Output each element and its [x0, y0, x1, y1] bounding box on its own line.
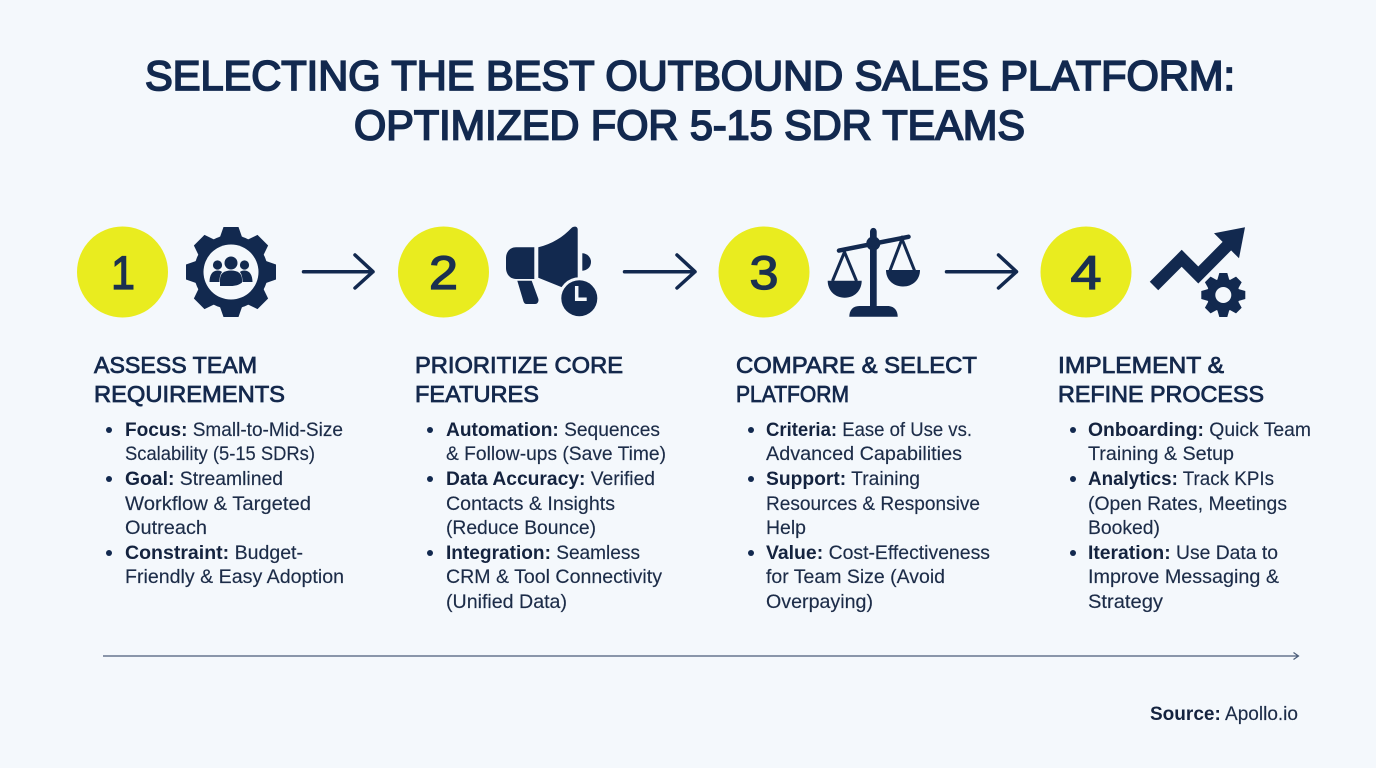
heading: assess team requirements: REQUIREMENTS — [94, 381, 285, 407]
step 3 number badge: 3 — [750, 246, 778, 299]
list: step 3 details: Overpaying) — [766, 591, 873, 613]
list: step 4 details: Onboarding: Quick Team — [1088, 419, 1311, 441]
list: step 3 details — [748, 419, 990, 613]
heading: prioritize core features: FEATURES — [415, 381, 539, 407]
step 2 number badge — [398, 226, 489, 318]
heading: compare and select platform — [736, 352, 977, 407]
source note: Source: Apollo.io — [1150, 703, 1298, 725]
list: step 4 details: Improve Messaging & — [1088, 566, 1279, 588]
step 1 number badge — [77, 226, 168, 318]
list: step 1 details — [106, 419, 344, 588]
heading: compare and select platform: COMPARE & SELECT — [736, 352, 977, 378]
list: step 2 details: & Follow-ups (Save Time) — [446, 443, 666, 465]
list: step 4 details: Analytics: Track KPIs — [1088, 468, 1274, 490]
list: step 2 details: Automation: Sequences — [446, 419, 660, 441]
list: step 4 details — [1070, 419, 1311, 613]
list: step 3 details: Resources & Responsive — [766, 493, 980, 515]
list: step 1 details: Scalability (5-15 SDRs) — [125, 443, 315, 465]
title — [145, 52, 1235, 148]
list: step 3 details: Help — [766, 517, 806, 539]
timeline arrow — [103, 652, 1298, 660]
heading: assess team requirements — [94, 352, 285, 407]
list: step 2 details: CRM & Tool Connectivity — [446, 566, 662, 588]
heading: prioritize core features: PRIORITIZE CORE — [415, 352, 623, 378]
list: step 4 details: Iteration: Use Data to — [1088, 542, 1278, 564]
title: SELECTING THE BEST OUTBOUND SALES PLATFORM: — [145, 52, 1235, 99]
list: step 1 details: Outreach — [125, 517, 207, 539]
step 1 number badge: 1 — [111, 246, 135, 299]
heading: prioritize core features — [415, 352, 623, 407]
list: step 4 details: (Open Rates, Meetings — [1088, 493, 1287, 515]
list: step 1 details: Workflow & Targeted — [125, 493, 311, 515]
heading: implement and refine process — [1058, 352, 1264, 407]
arrow: step 3 to step 4 — [946, 255, 1016, 288]
icon: megaphone with clock — [506, 227, 600, 319]
arrow: step 2 to step 3 — [624, 255, 695, 288]
list: step 3 details: Value: Cost-Effectiveness — [766, 542, 990, 564]
step 4 number badge — [1040, 226, 1132, 318]
heading: compare and select platform: PLATFORM — [736, 381, 849, 407]
step 2 number badge: 2 — [429, 246, 458, 299]
list: step 3 details: Criteria: Ease of Use vs. — [766, 419, 972, 441]
list: step 3 details: Support: Training — [766, 468, 920, 490]
icon: gear with team — [186, 227, 276, 317]
list: step 4 details: Training & Setup — [1088, 443, 1234, 465]
list: step 4 details: Booked) — [1088, 517, 1160, 539]
panel: step 4 text — [1058, 352, 1311, 613]
step 4 number badge: 4 — [1070, 246, 1102, 299]
panel: step 1 text — [94, 352, 344, 588]
list: step 1 details: Focus: Small-to-Mid-Size — [125, 419, 343, 441]
step 3 number badge — [718, 226, 810, 318]
list: step 2 details: (Reduce Bounce) — [446, 517, 596, 539]
list: step 1 details: Goal: Streamlined — [125, 468, 283, 490]
list: step 2 details: Integration: Seamless — [446, 542, 640, 564]
list: step 2 details: Data Accuracy: Verified — [446, 468, 655, 490]
arrow: step 1 to step 2 — [304, 255, 373, 288]
heading: assess team requirements: ASSESS TEAM — [94, 352, 257, 378]
panel: step 3 text — [736, 352, 990, 613]
heading: implement and refine process: REFINE PROCESS — [1058, 381, 1264, 407]
panel: step 2 text — [415, 352, 666, 613]
list: step 4 details: Strategy — [1088, 591, 1163, 613]
list: step 2 details: (Unified Data) — [446, 591, 567, 613]
heading: implement and refine process: IMPLEMENT & — [1058, 352, 1224, 378]
list: step 3 details: Advanced Capabilities — [766, 443, 962, 465]
list: step 3 details: for Team Size (Avoid — [766, 566, 945, 588]
list: step 1 details: Constraint: Budget- — [125, 542, 303, 564]
list: step 2 details: Contacts & Insights — [446, 493, 615, 515]
icon: growth arrow with gear — [1154, 227, 1248, 320]
icon: balance scale — [828, 228, 920, 317]
title: OPTIMIZED FOR 5-15 SDR TEAMS — [354, 102, 1025, 148]
list: step 1 details: Friendly & Easy Adoption — [125, 566, 344, 588]
list: step 2 details — [427, 419, 666, 613]
